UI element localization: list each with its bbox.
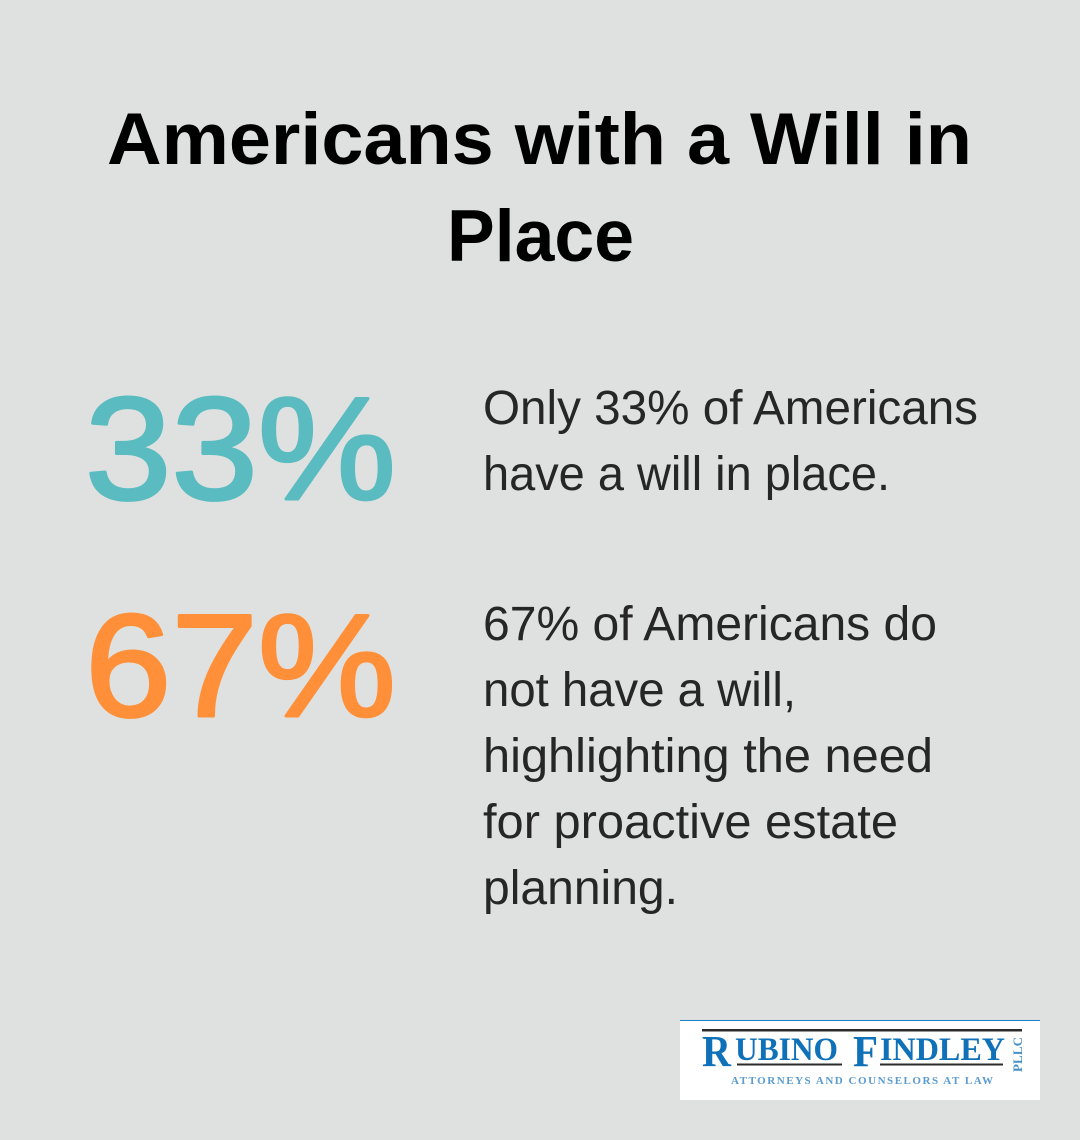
logo: Rubino Findley PLLC: ATTORNEYS AND COUNSELORS AT LAW — [731, 1075, 993, 1087]
stat: 67%: 67% — [85, 584, 396, 747]
text: 67% description — [483, 598, 937, 915]
logo: Rubino Findley PLLC: F — [853, 1027, 878, 1076]
logo: Rubino Findley PLLC: PLLC — [1010, 1037, 1025, 1072]
text: 33% description: have a will in place. — [483, 448, 890, 501]
title — [107, 99, 972, 277]
text: 67% description: not have a will, — [483, 664, 796, 717]
text: 33% description — [483, 382, 978, 501]
logo: Rubino Findley PLLC — [680, 1020, 1040, 1100]
text: 33% description: Only 33% of Americans — [483, 382, 978, 435]
text: 67% description: highlighting the need — [483, 730, 933, 783]
text: 67% description: planning. — [483, 862, 678, 915]
text: 67% description: 67% of Americans do — [483, 598, 937, 651]
text: 67% description: for proactive estate — [483, 796, 898, 849]
title: Americans with a Will in — [107, 99, 972, 180]
stat: 33%: 33% — [85, 367, 396, 530]
logo: Rubino Findley PLLC: R — [702, 1027, 732, 1076]
logo: Rubino Findley PLLC: INDLEY — [880, 1032, 1005, 1068]
logo: Rubino Findley PLLC: UBINO — [735, 1032, 838, 1068]
title: Place — [447, 196, 634, 277]
